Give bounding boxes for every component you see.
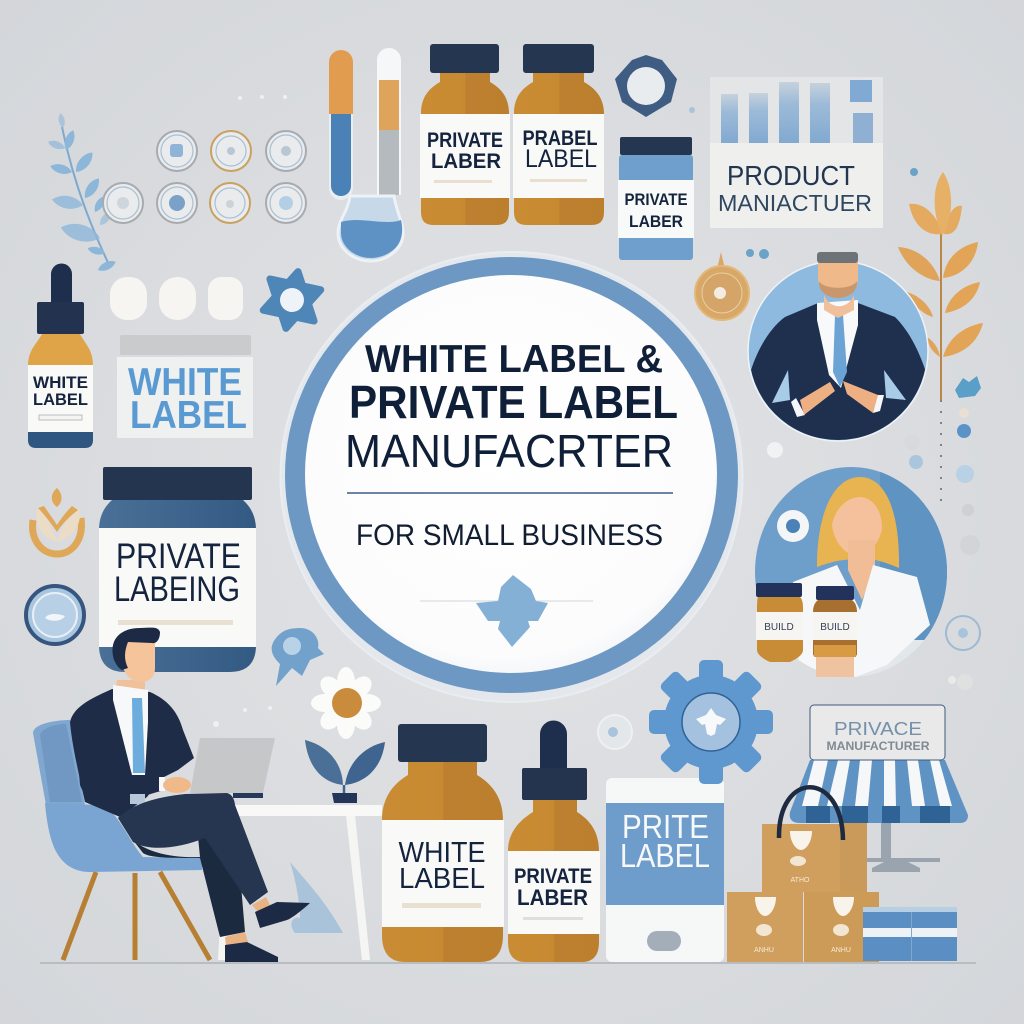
icon: shopping bag and boxes: ANHU xyxy=(754,947,774,954)
icon: flower and plant xyxy=(305,667,385,803)
dropper bottle: private label bottom: LABER xyxy=(517,885,588,910)
icon: hexagon badge xyxy=(615,55,677,117)
portrait: woman with jars xyxy=(750,460,950,678)
icon: coins and capsule grid xyxy=(103,131,306,223)
jar: small blue private label: PRIVATE xyxy=(624,190,688,209)
badge title: WHITE LABEL & xyxy=(365,338,663,381)
dropper bottle: white label: WHITE xyxy=(33,373,88,392)
jar: private label right top: LABEL xyxy=(525,145,597,173)
jar: white label box xyxy=(117,335,253,438)
ground line xyxy=(40,962,976,964)
laptop xyxy=(190,738,275,798)
panel: product manufacturer chart card xyxy=(710,77,883,228)
badge leaf emblem xyxy=(476,575,548,647)
badge title xyxy=(345,338,678,477)
jar: private label right top xyxy=(513,44,604,225)
jar: white label bottom: WHITE xyxy=(398,837,486,869)
icon: shopping bag and boxes: ANHU xyxy=(831,947,851,954)
badge title: MANUFACRTER xyxy=(345,425,673,477)
dropper bottle: private label bottom xyxy=(508,720,600,962)
icon: storefront with striped awning xyxy=(790,705,968,872)
jar: white label box: WHITE xyxy=(128,361,242,404)
jar: private label left top: PRIVATE xyxy=(427,129,503,152)
icon: blue atom xyxy=(261,266,323,334)
jar: small blue private label xyxy=(618,137,694,260)
chair xyxy=(33,720,210,960)
jar: white label box: LABEL xyxy=(130,394,247,437)
jar: private label right top: PRABEL xyxy=(522,127,598,150)
icon: white pills xyxy=(110,277,243,320)
small jars in portrait: BUILD xyxy=(764,622,794,633)
jar: private label left top: LABER xyxy=(431,150,501,173)
desk xyxy=(218,805,382,960)
jar: private labeling large: PRIVATE xyxy=(116,537,241,576)
icon: blue stacked containers xyxy=(863,907,957,961)
decorative bubbles xyxy=(213,95,981,749)
tube: prite label: LABEL xyxy=(620,837,710,874)
icon: amber leaf branch right xyxy=(898,172,983,505)
icon: faint plant xyxy=(290,862,343,933)
icon: storefront with striped awning: MANUFACTURER xyxy=(826,739,930,753)
icon: lens circle xyxy=(26,586,84,644)
dropper bottle: white label xyxy=(28,264,93,448)
panel: product manufacturer chart card: MANIACTUER xyxy=(718,190,872,216)
dropper bottle: private label bottom: PRIVATE xyxy=(514,865,592,888)
tube: prite label: PRITE xyxy=(622,808,709,845)
icon: gold badge xyxy=(695,252,749,320)
jar: small blue private label: LABER xyxy=(629,212,683,231)
icon: small blue flower mark xyxy=(272,628,324,686)
dropper bottle: white label: LABEL xyxy=(33,390,88,409)
icon: storefront with striped awning: PRIVACE xyxy=(834,719,922,739)
badge subtitle: FOR SMALL BUSINESS xyxy=(356,519,663,552)
portrait: businessman in suit xyxy=(745,252,930,445)
illustration: man on laptop in chair xyxy=(33,628,310,962)
icon: shopping bag and boxes: ATHO xyxy=(791,877,810,884)
badge title: PRIVATE LABEL xyxy=(349,376,678,428)
small jars in portrait: BUILD xyxy=(820,622,850,633)
man xyxy=(70,628,310,962)
small jars in portrait xyxy=(756,583,857,662)
jar: white label bottom xyxy=(382,724,504,962)
icon: shopping bag and boxes xyxy=(727,787,879,962)
icon: blue gear xyxy=(649,660,773,784)
jar: private label left top xyxy=(420,44,510,225)
panel: product manufacturer chart card: PRODUCT xyxy=(727,160,855,191)
jar: private labeling large xyxy=(99,467,256,672)
jar: private labeling large: LABEING xyxy=(114,570,240,609)
tube: prite label xyxy=(606,778,724,962)
jar: white label bottom: LABEL xyxy=(399,863,485,895)
icon: test tubes and flask xyxy=(329,48,403,261)
icon: amber sprig in circle xyxy=(33,488,81,554)
icon: leaf sprig top left xyxy=(47,113,117,274)
central badge xyxy=(280,252,742,702)
